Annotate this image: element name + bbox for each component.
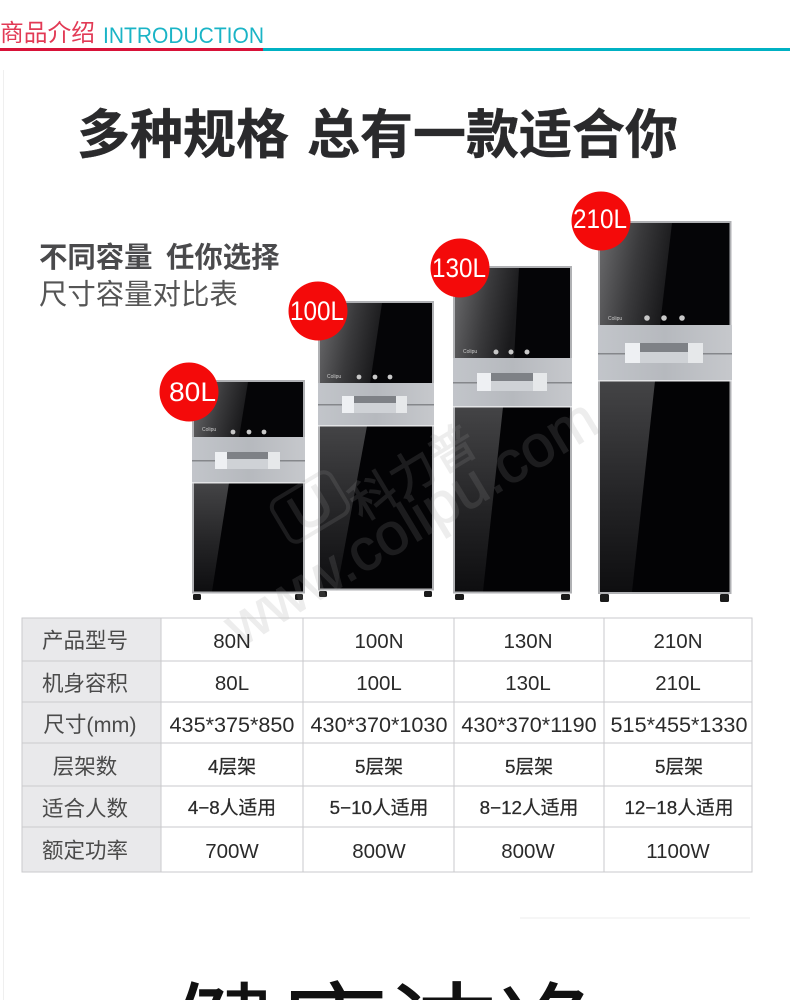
row: shelves: 5层架 xyxy=(355,756,403,777)
row: model: 80N xyxy=(213,630,251,653)
cabinet: 80L xyxy=(192,380,305,600)
capacity badge: 130L xyxy=(430,238,490,298)
row: capacity: 80L xyxy=(215,672,249,695)
subtitle bold line: 不同容量 xyxy=(39,242,153,274)
subtitle regular line: 尺寸容量对比表 xyxy=(39,279,238,311)
main title: 多种规格 xyxy=(77,106,289,165)
row: model: 130N xyxy=(503,630,553,653)
capacity badge: 100L: 100L xyxy=(290,296,344,326)
row: power: 800W xyxy=(501,840,555,863)
watermark xyxy=(212,385,609,660)
content panel edge xyxy=(3,70,4,1000)
row: model xyxy=(42,629,703,653)
row: power: 700W xyxy=(205,840,259,863)
table: grid xyxy=(22,618,752,872)
row: shelves: 5层架 xyxy=(505,756,553,777)
section header xyxy=(0,20,790,51)
subtitle block xyxy=(39,242,280,311)
capacity badge: 80L: 80L xyxy=(169,377,216,407)
watermark: logo xyxy=(268,469,352,545)
capacity badge: 100L xyxy=(288,282,348,340)
header rule: red xyxy=(0,48,263,51)
main title: 总有一款适合你 xyxy=(307,106,678,165)
row: dimensions: 430*370*1030 xyxy=(311,712,447,737)
row: dimensions: 430*370*1190 xyxy=(461,712,597,737)
row: model: 210N xyxy=(653,630,703,653)
cabinet: 100L: Colipu xyxy=(327,374,341,380)
row: people: 适合人数 xyxy=(42,797,128,821)
header: Chinese label: 商品介绍 xyxy=(0,20,95,47)
row: power: 额定功率 xyxy=(42,839,128,863)
row: capacity: 100L xyxy=(356,672,402,695)
row: capacity: 210L xyxy=(655,672,701,695)
watermark: brand name: 科力普 xyxy=(340,415,485,531)
cabinet: 100L xyxy=(318,301,434,597)
subtitle bold line: 任你选择 xyxy=(166,242,280,274)
row: capacity: 130L xyxy=(505,672,551,695)
cabinet: 210L: Colipu xyxy=(608,316,622,322)
cabinet: 130L xyxy=(453,266,572,600)
row: people xyxy=(42,797,734,821)
row: shelves xyxy=(53,755,703,779)
row: dimensions xyxy=(43,712,747,737)
table: label column fill xyxy=(22,618,161,872)
row: power xyxy=(42,839,710,863)
cabinet: 130L: Colipu xyxy=(463,349,477,355)
row: power: 1100W xyxy=(646,840,710,863)
row: dimensions: 尺寸(mm) xyxy=(43,713,137,737)
capacity badge: 210L xyxy=(572,192,630,250)
header: English label: INTRODUCTION xyxy=(103,23,264,48)
row: dimensions: 435*375*850 xyxy=(170,712,294,737)
row: shelves: 层架数 xyxy=(53,755,117,779)
capacity badge: 130L: 130L xyxy=(432,253,486,283)
row: people: 8−12人适用 xyxy=(480,797,578,818)
row: model: 产品型号 xyxy=(42,629,128,653)
faint divider band xyxy=(520,917,750,919)
specification table xyxy=(22,618,752,872)
row: shelves: 5层架 xyxy=(655,756,703,777)
row: model: 100N xyxy=(354,630,404,653)
row: dimensions: 515*455*1330 xyxy=(611,712,747,737)
row: people: 5−10人适用 xyxy=(330,797,428,818)
cabinet: 210L xyxy=(598,221,732,602)
row: shelves: 4层架 xyxy=(208,756,256,777)
row: power: 800W xyxy=(352,840,406,863)
watermark: url: www.colipu.com xyxy=(212,385,609,660)
cabinet: 80L: Colipu xyxy=(202,427,216,433)
capacity badge: 210L: 210L xyxy=(573,204,627,234)
row: people: 4−8人适用 xyxy=(188,797,276,818)
row: capacity: 机身容积 xyxy=(42,672,128,696)
header rule: teal xyxy=(263,48,790,51)
row: capacity xyxy=(42,672,701,696)
capacity badge: 80L xyxy=(160,362,218,422)
row: people: 12−18人适用 xyxy=(624,797,734,818)
